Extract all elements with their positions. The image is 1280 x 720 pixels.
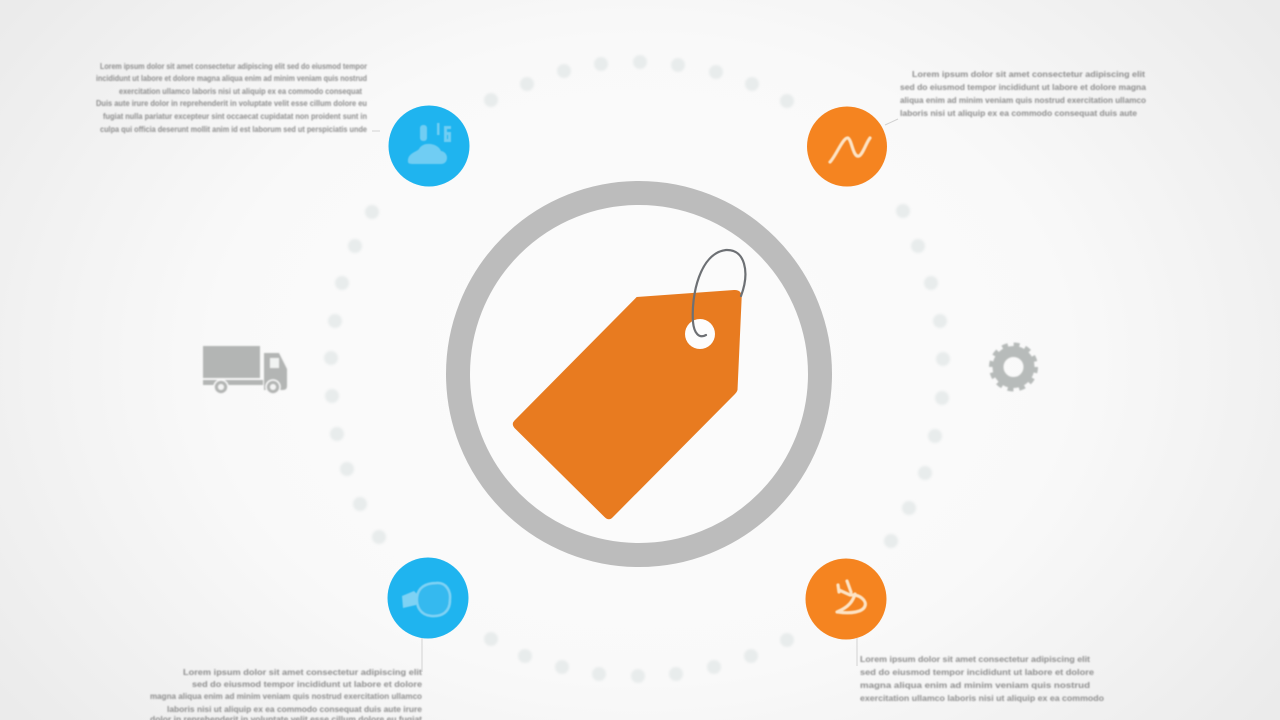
tag string: [693, 250, 745, 336]
text block: top left: Lorem ipsum dolor sit amet consectetur adipiscing elit sed do eiusmod tempor: [100, 62, 367, 71]
text block: top right: Lorem ipsum dolor sit amet consectetur adipiscing elit: [912, 70, 1145, 79]
truck cargo box: [203, 346, 260, 378]
truck wheels: [214, 380, 228, 394]
text block: top left: [96, 62, 367, 134]
text block: bottom left: [150, 668, 423, 720]
text block: bottom right: [860, 655, 1104, 703]
text block: top right: [900, 70, 1147, 118]
text block: top right: laboris nisi ut aliquip ex ea commodo consequat duis aute: [900, 109, 1138, 118]
icon: bottom right orange circle: [806, 558, 886, 640]
text block: bottom left: sed do eiusmod tempor incididunt ut labore et dolore: [192, 680, 423, 689]
text block: bottom left: laboris nisi ut aliquip ex ea commodo consequat duis aute irure: [167, 705, 423, 714]
text block: bottom left: magna aliqua enim ad minim veniam quis nostrud exercitation ullamco: [150, 692, 422, 701]
text block: bottom right: magna aliqua enim ad minim veniam quis nostrud: [860, 681, 1090, 690]
text block: top left: incididunt ut labore et dolore magna aliqua enim ad minim veniam quis nostrud: [96, 74, 367, 83]
icon: bottom left blue circle: [388, 558, 468, 638]
text block: top right: sed do eiusmod tempor incididunt ut labore et dolore magna: [900, 83, 1147, 92]
text block: top left: fugiat nulla pariatur excepteur sint occaecat cupidatat non proident sunt in: [103, 112, 367, 121]
text block: top left: exercitation ullamco laboris nisi ut aliquip ex ea commodo consequat: [119, 87, 362, 96]
tag body: [513, 290, 742, 519]
price tag: [513, 250, 745, 519]
text block: top right: aliqua enim ad minim veniam quis nostrud exercitation ullamco: [900, 96, 1146, 105]
text block: bottom right: exercitation ullamco laboris nisi ut aliquip ex ea commodo: [860, 694, 1104, 703]
truck cab: [264, 353, 287, 390]
text block: top left: Duis aute irure dolor in reprehenderit in voluptate velit esse cillum dolore eu: [96, 99, 367, 108]
icon: top left blue circle: [388, 106, 470, 186]
connector lines: [372, 119, 898, 672]
icon: truck: [203, 346, 287, 394]
central ring: [458, 193, 820, 555]
text block: top left: culpa qui officia deserunt mollit anim id est laborum sed ut perspiciatis unde: [100, 125, 367, 134]
text block: bottom left: Lorem ipsum dolor sit amet consectetur adipiscing elit: [183, 668, 422, 677]
text block: bottom right: Lorem ipsum dolor sit amet consectetur adipiscing elit: [860, 655, 1090, 664]
text block: bottom right: sed do eiusmod tempor incididunt ut labore et dolore: [860, 668, 1095, 677]
icon: top right orange circle: [807, 106, 887, 186]
icon: gear: [992, 345, 1036, 389]
dotted circle: [324, 55, 950, 683]
tag eyelet: [685, 319, 715, 349]
